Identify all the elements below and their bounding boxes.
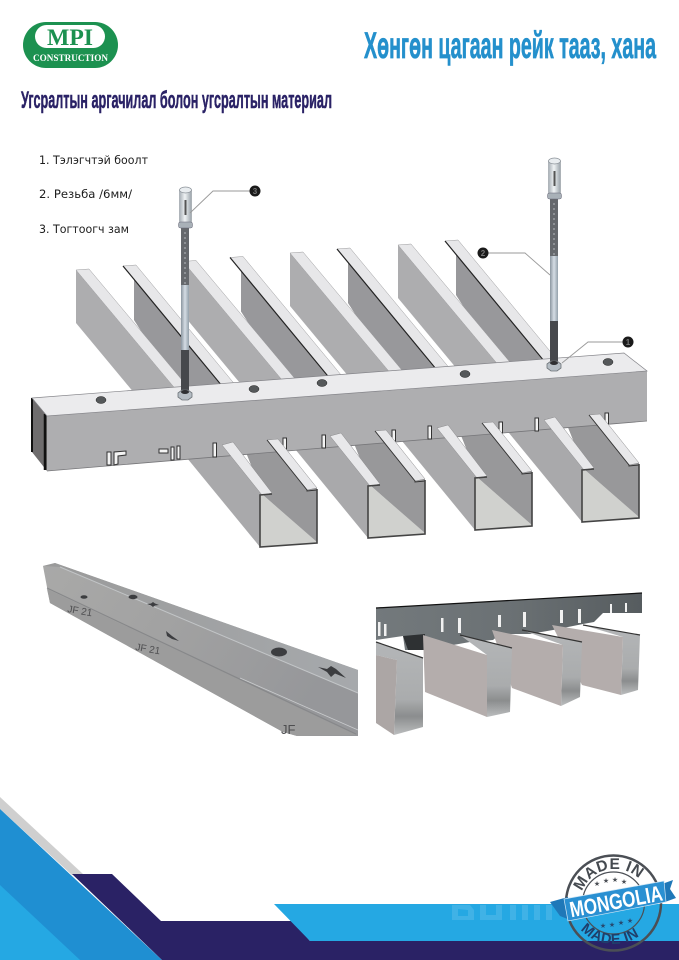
mid blue triangle (0, 809, 162, 960)
stamp stars: ★ (627, 917, 633, 925)
panel 2 (423, 635, 512, 717)
carrier rail (32, 353, 647, 471)
stamp stars (594, 876, 633, 930)
stamp rings (566, 856, 661, 950)
upper channels behind carrier (76, 240, 559, 394)
left bolt (178, 187, 192, 400)
logo: MPI Construction: CONSTRUCTION (33, 54, 108, 64)
stamp bottom text: MADE IN (581, 922, 638, 944)
rail photo stamped marks: JF 21 (134, 642, 161, 657)
lower channel walls (187, 420, 639, 547)
logo: MPI Construction: MPI (47, 25, 93, 50)
ceiling system diagram (32, 158, 647, 547)
stamp top text: MADE IN (573, 858, 644, 890)
rail photo stamped marks (66, 604, 295, 737)
list item 2: 2. Резьба /6мм/ (39, 187, 132, 201)
panel 1 (376, 642, 423, 735)
photo: steel carrier rail (43, 563, 358, 737)
callout 1: 1 (626, 338, 631, 347)
navy band (72, 874, 679, 960)
carrier strip with teeth (376, 593, 642, 650)
callout 3 (190, 186, 260, 213)
stamp: Made in Mongolia (550, 854, 676, 952)
rail photo holes (80, 595, 346, 678)
watermark marks (452, 905, 552, 920)
photo: slat ceiling panels (376, 593, 642, 735)
panel 3 (492, 630, 582, 706)
rail photo stamped marks: JF 21 (66, 604, 93, 619)
rail slots (107, 413, 608, 465)
list item 1: 1. Тэлэгчтэй боолт (39, 153, 148, 167)
rail photo stamped marks: JF (281, 722, 296, 737)
strip cut-outs (378, 603, 627, 636)
callout 2 (478, 248, 550, 275)
rail holes (96, 358, 613, 404)
stamp stars: ★ (594, 880, 600, 888)
callout 1 (562, 336, 634, 363)
lower channel flanges (222, 414, 639, 547)
footer: geometric band (0, 797, 679, 960)
logo: MPI Construction (23, 22, 118, 68)
subheading: Угсралтын аргачилал болон угсралтын материал (21, 87, 332, 114)
stamp stars: ★ (621, 878, 627, 886)
stamp stars: ★ (600, 922, 606, 930)
light blue triangle (0, 885, 80, 960)
stamp stars: ★ (609, 921, 615, 929)
strip shadow under teeth (403, 634, 425, 650)
callout 3: 3 (253, 187, 258, 196)
stamp stars: ★ (603, 877, 609, 885)
panel 4 (552, 625, 640, 695)
light blue band (274, 904, 679, 941)
right bolt (547, 158, 562, 371)
stamp stars: ★ (618, 919, 624, 927)
callout 2: 2 (481, 249, 486, 258)
parts list (39, 153, 148, 236)
grey stripe (0, 797, 83, 875)
stamp stars: ★ (612, 876, 618, 884)
list item 3: 3. Тогтоогч зам (39, 222, 129, 236)
